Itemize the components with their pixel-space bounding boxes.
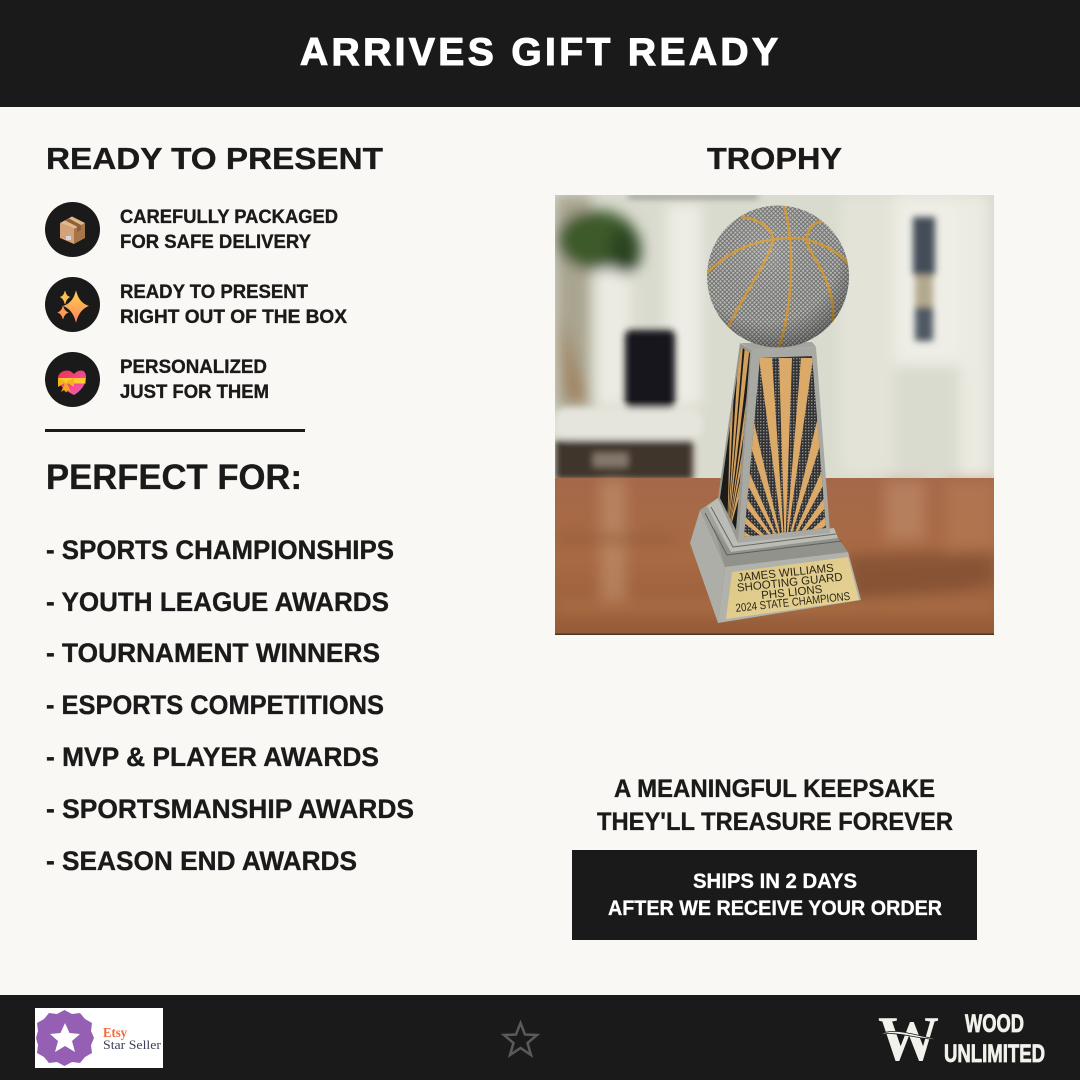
benefit: personalized [45, 352, 269, 407]
benefit: ready to present [45, 277, 347, 332]
wooden table [555, 478, 995, 635]
text [120, 207, 338, 253]
text [120, 357, 269, 403]
text [120, 282, 347, 328]
logo: Wood Unlimited: WOOD [965, 1010, 1024, 1038]
keepsake message [597, 775, 953, 836]
trophy base: PHS LIONS [761, 584, 823, 602]
benefit: carefully packaged [45, 202, 338, 257]
text: CAREFULLY PACKAGED [120, 207, 338, 228]
keepsake message: A MEANINGFUL KEEPSAKE [614, 775, 935, 803]
text: READY TO PRESENT [120, 282, 308, 303]
basketball [707, 206, 849, 348]
header banner [0, 0, 1080, 107]
shipping callout: SHIPS IN 2 DAYS [693, 870, 857, 893]
badge: Etsy Star Seller [35, 1008, 163, 1068]
icon: heart with ribbon [45, 352, 100, 407]
logo: Wood Unlimited: W [878, 1003, 939, 1074]
list: occasions: - SPORTS CHAMPIONSHIPS [46, 535, 394, 565]
keepsake message: THEY'LL TREASURE FOREVER [597, 808, 953, 836]
list: occasions: - ESPORTS COMPETITIONS [46, 690, 384, 720]
heading: trophy: TROPHY [707, 141, 842, 176]
footer bar [0, 995, 1080, 1080]
trophy base: SHOOTING GUARD [736, 572, 843, 595]
text: FOR SAFE DELIVERY [120, 232, 311, 253]
list: occasions: - YOUTH LEAGUE AWARDS [46, 587, 389, 617]
text: JUST FOR THEM [120, 382, 269, 403]
logo: Wood Unlimited: UNLIMITED [944, 1040, 1045, 1068]
trophy column [718, 342, 830, 543]
list: occasions: - TOURNAMENT WINNERS [46, 638, 380, 668]
heading: perfect for: PERFECT FOR: [46, 458, 302, 497]
text: PERSONALIZED [120, 357, 267, 378]
blurred room background [555, 195, 995, 480]
badge: Etsy Star Seller: Star Seller [103, 1038, 162, 1052]
badge: Etsy Star Seller: Etsy [103, 1026, 127, 1041]
shipping callout [572, 850, 977, 940]
list: occasions: - SPORTSMANSHIP AWARDS [46, 794, 414, 824]
shipping callout: AFTER WE RECEIVE YOUR ORDER [608, 897, 942, 920]
icon: star outline [504, 1023, 537, 1055]
list: occasions [46, 535, 414, 876]
icon: package [45, 202, 100, 257]
text: RIGHT OUT OF THE BOX [120, 307, 347, 328]
title: ARRIVES GIFT READY [300, 31, 778, 74]
list: occasions: - SEASON END AWARDS [46, 846, 357, 876]
photo: basketball trophy on table [555, 195, 994, 635]
list: occasions: - MVP & PLAYER AWARDS [46, 742, 379, 772]
trophy base [690, 498, 861, 623]
heading: ready to present: READY TO PRESENT [46, 141, 383, 176]
trophy base: 2024 STATE CHAMPIONS [735, 591, 851, 615]
logo: Wood Unlimited [878, 1003, 1045, 1074]
icon: sparkles [45, 277, 100, 332]
trophy base: JAMES WILLIAMS [737, 562, 835, 584]
